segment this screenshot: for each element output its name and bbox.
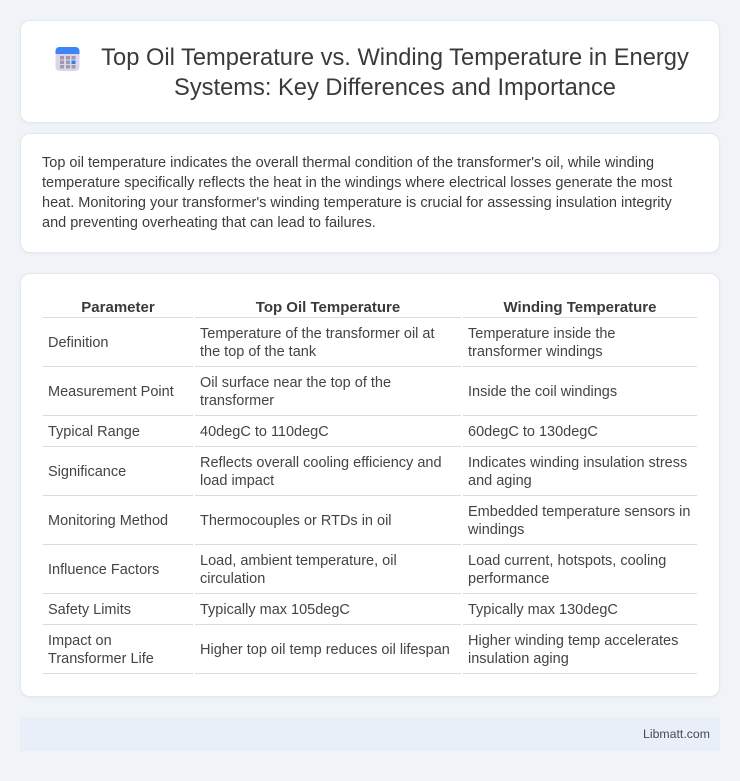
- row: Safety Limits: Typically max 105degC: [200, 602, 350, 618]
- intro paragraph: Top oil temperature indicates the overall thermal condition of the transformer's oil, while winding: [42, 155, 654, 171]
- row: Monitoring Method: windings: [468, 522, 524, 538]
- row: Definition: Temperature inside the: [468, 326, 616, 342]
- row: Safety Limits: [48, 602, 618, 618]
- table header: Parameter: [81, 299, 155, 316]
- row: Typical Range: 40degC to 110degC: [200, 424, 329, 440]
- row: Definition: Definition: [48, 335, 108, 351]
- table header: [81, 299, 656, 316]
- row: Influence Factors: performance: [468, 571, 549, 587]
- row: Influence Factors: Load current, hotspots, cooling: [468, 553, 666, 569]
- row: Measurement Point: Measurement Point: [48, 384, 174, 400]
- row: Influence Factors: Load, ambient temperature, oil: [200, 553, 397, 569]
- table header: Top Oil Temperature: [256, 299, 400, 316]
- row: Significance: and aging: [468, 473, 532, 489]
- intro paragraph: temperature specifically reflects the heat in the windings where electrical losses generate the most: [42, 175, 672, 191]
- intro paragraph: [42, 155, 672, 231]
- footer bar: [20, 717, 720, 751]
- row: Significance: [48, 455, 687, 489]
- row: Influence Factors: circulation: [200, 571, 265, 587]
- row: Measurement Point: Inside the coil windings: [468, 384, 617, 400]
- table header: Winding Temperature: [504, 299, 656, 316]
- row: Typical Range: 60degC to 130degC: [468, 424, 598, 440]
- icon: calendar grid: [56, 47, 80, 71]
- row: Safety Limits: Typically max 130degC: [468, 602, 618, 618]
- row: Impact on Transformer Life: [48, 633, 678, 667]
- title: [101, 45, 689, 101]
- intro paragraph: heat. Monitoring your transformer's winding temperature is crucial for assessing insulation integrity: [42, 195, 672, 211]
- row: Influence Factors: Influence Factors: [48, 562, 159, 578]
- row: Significance: Reflects overall cooling efficiency and: [200, 455, 442, 471]
- row: Significance: load impact: [200, 473, 274, 489]
- row: Measurement Point: Oil surface near the top of the: [200, 375, 391, 391]
- row: Typical Range: [48, 424, 598, 440]
- title: Top Oil Temperature vs. Winding Temperature in Energy: [101, 45, 689, 71]
- panel: title card: [20, 20, 720, 123]
- panel: comparison table: [20, 273, 720, 697]
- row: Significance: Indicates winding insulation stress: [468, 455, 687, 471]
- row: Impact on Transformer Life: insulation aging: [468, 651, 569, 667]
- footer credit: Libmatt.com: [643, 727, 710, 741]
- row: Definition: [48, 326, 616, 360]
- row: Monitoring Method: Thermocouples or RTDs in oil: [200, 513, 392, 529]
- row: Definition: Temperature of the transformer oil at: [200, 326, 435, 342]
- intro paragraph: and preventing overheating that can lead to failures.: [42, 215, 376, 231]
- row: Impact on Transformer Life: Higher winding temp accelerates: [468, 633, 678, 649]
- panel: intro text: [20, 133, 720, 253]
- row: Monitoring Method: Embedded temperature sensors in: [468, 504, 690, 520]
- row: Measurement Point: transformer: [200, 393, 274, 409]
- row: Influence Factors: [48, 553, 666, 587]
- row: Impact on Transformer Life: Higher top oil temp reduces oil lifespan: [200, 642, 450, 658]
- title: Systems: Key Differences and Importance: [174, 75, 616, 101]
- row: Significance: Significance: [48, 464, 126, 480]
- row: Typical Range: Typical Range: [48, 424, 140, 440]
- row: Definition: the top of the tank: [200, 344, 316, 360]
- row: Impact on Transformer Life: Impact on: [48, 633, 112, 649]
- row: Measurement Point: [48, 375, 617, 409]
- row: Monitoring Method: Monitoring Method: [48, 513, 168, 529]
- row: Monitoring Method: [48, 504, 690, 538]
- row: Safety Limits: Safety Limits: [48, 602, 131, 618]
- row: Impact on Transformer Life: Transformer Life: [48, 651, 154, 667]
- row: Definition: transformer windings: [468, 344, 603, 360]
